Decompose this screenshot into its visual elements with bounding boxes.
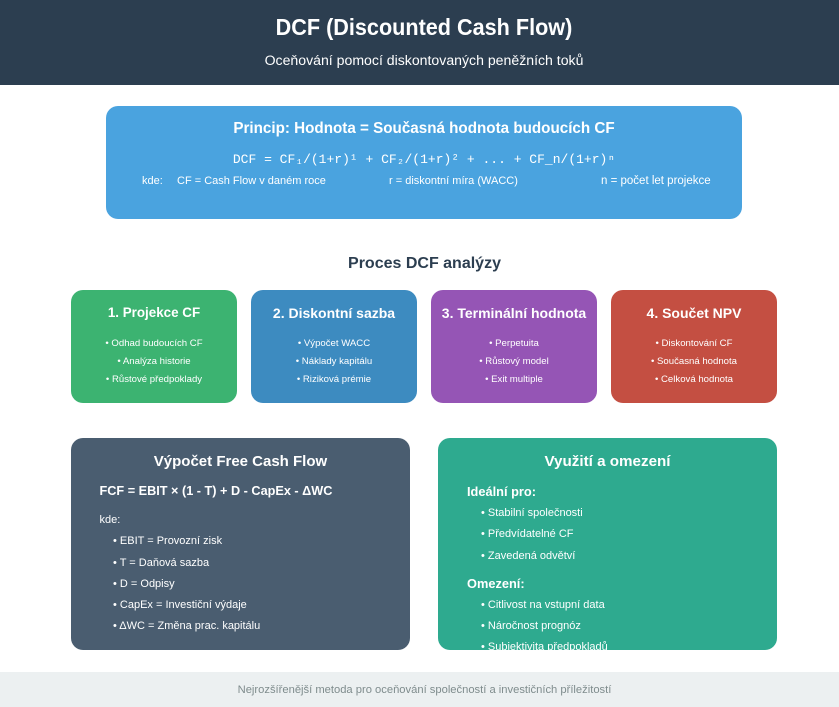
panel: use and limits <box>438 438 777 650</box>
use heading: Využití a omezení <box>544 453 671 470</box>
step 2 heading: 2. Diskontní sazba <box>273 305 395 321</box>
title: DCF (Discounted Cash Flow) <box>276 14 572 40</box>
legend: CF: CF = Cash Flow v daném roce <box>177 175 326 187</box>
card: step 4 <box>611 290 777 403</box>
step 4 heading: 4. Součet NPV <box>647 305 741 321</box>
ideal for list: • Stabilní společnosti <box>481 507 583 519</box>
step 4 list: • Diskontování CF <box>656 338 732 349</box>
step 4 list <box>651 338 737 385</box>
card: step 2 <box>251 290 417 403</box>
panel: free cash flow <box>71 438 410 650</box>
ideal for list <box>481 507 583 562</box>
variable list: • CapEx = Investiční výdaje <box>113 599 247 611</box>
ideal for heading: Ideální pro: <box>467 484 536 499</box>
panel: principle <box>106 106 742 219</box>
step 4 list: • Celková hodnota <box>655 374 733 385</box>
FCF heading: Výpočet Free Cash Flow <box>154 453 327 470</box>
footer note: Nejrozšířenější metoda pro oceňování společností a investičních příležitostí <box>238 684 611 696</box>
step 1 list: • Růstové předpoklady <box>106 374 202 385</box>
principle heading: Princip: Hodnota = Současná hodnota budoucích CF <box>233 120 615 137</box>
ideal for list: • Zavedená odvětví <box>481 550 575 562</box>
step 1 list: • Odhad budoucích CF <box>105 338 203 349</box>
ideal for list: • Předvídatelné CF <box>481 528 574 540</box>
footer <box>0 672 839 707</box>
FCF formula: FCF = EBIT × (1 - T) + D - CapEx - ΔWC <box>100 484 332 498</box>
step 1 list: • Analýza historie <box>117 356 191 367</box>
legend: kde: kde: <box>142 175 163 187</box>
DCF formula: DCF = CF₁/(1+r)¹ + CF₂/(1+r)² + ... + CF_n/(1+r)ⁿ <box>233 152 615 167</box>
kde label: kde: <box>100 514 120 526</box>
step 2 list <box>296 338 372 385</box>
limits list: • Citlivost na vstupní data <box>481 599 605 611</box>
limits heading: Omezení: <box>467 576 525 591</box>
step 3 list: • Exit multiple <box>485 374 543 385</box>
section heading: process: Proces DCF analýzy <box>348 255 501 272</box>
step 3 heading: 3. Terminální hodnota <box>442 305 586 321</box>
variable list: • ΔWC = Změna prac. kapitálu <box>113 620 260 632</box>
step 3 list: • Růstový model <box>479 356 549 367</box>
variable list: • EBIT = Provozní zisk <box>113 535 222 547</box>
card: step 1 <box>71 290 237 403</box>
step 2 list: • Riziková prémie <box>297 374 371 385</box>
step 2 list: • Náklady kapitálu <box>296 356 372 367</box>
step 1 heading: 1. Projekce CF <box>108 305 200 320</box>
variable list: • D = Odpisy <box>113 578 175 590</box>
step 3 list: • Perpetuita <box>489 338 539 349</box>
step 4 list: • Současná hodnota <box>651 356 737 367</box>
legend: r: r = diskontní míra (WACC) <box>389 175 518 187</box>
variable list <box>113 535 260 632</box>
card: step 3 <box>431 290 597 403</box>
limits list: • Náročnost prognóz <box>481 620 581 632</box>
legend: n: n = počet let projekce <box>601 175 711 187</box>
variable list: • T = Daňová sazba <box>113 557 209 569</box>
step 1 list <box>105 338 203 385</box>
step 2 list: • Výpočet WACC <box>298 338 370 349</box>
header band <box>0 0 839 85</box>
subtitle: Oceňování pomocí diskontovaných peněžních toků <box>265 52 583 68</box>
step 3 list <box>479 338 549 385</box>
limits list <box>481 599 608 650</box>
